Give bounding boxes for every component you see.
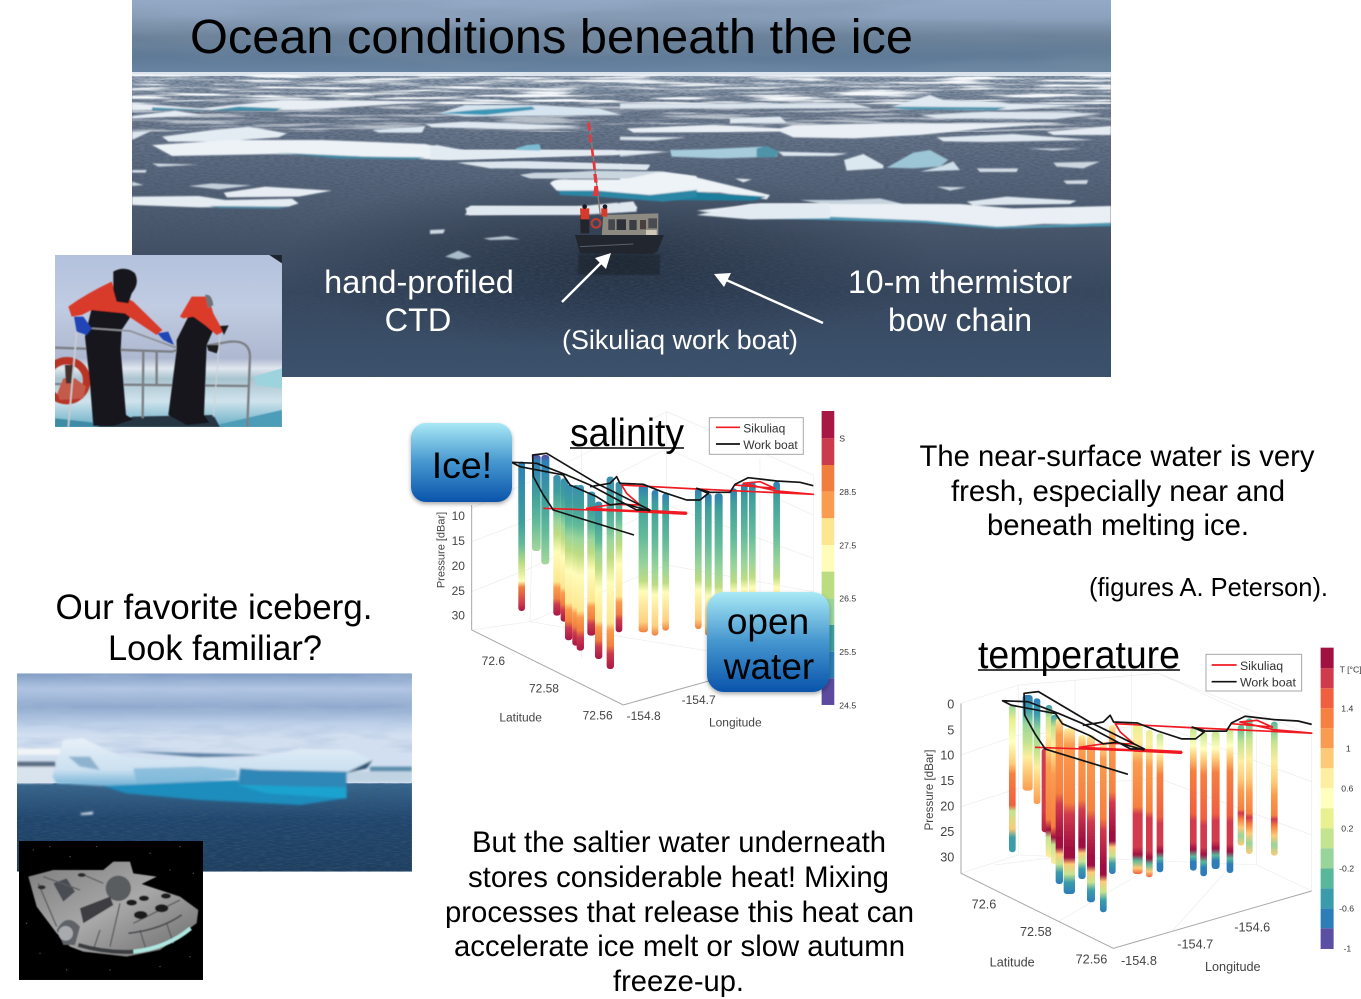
temperature axis labels: 25: [940, 825, 954, 839]
salinity axis labels: 72.58: [529, 681, 559, 695]
temperature axis labels: [923, 697, 1270, 974]
photo: iceberg: [17, 673, 412, 872]
text block: near-surface line 3: beneath melting ice.: [987, 509, 1249, 542]
right ice floes: [620, 95, 1111, 229]
temperature legend: Work boat: [1240, 676, 1297, 690]
salinity legend: [709, 418, 803, 454]
salinity axis labels: Pressure [dBar]: [436, 512, 448, 588]
boat and mast: [575, 118, 664, 275]
salinity colorbar: 27.5: [839, 540, 856, 550]
temperature data columns: [1009, 695, 1278, 912]
salinity legend: Sikuliaq: [743, 422, 785, 436]
temperature axis labels: 15: [940, 774, 954, 788]
label: 10-m thermistor bow chain: bow chain: [888, 302, 1032, 338]
temperature axis labels: 5: [947, 723, 954, 737]
temperature axis labels: 0: [947, 697, 954, 711]
heading: iceberg caption line 1: Our favorite iceberg.: [56, 588, 372, 627]
salinity colorbar: 26.5: [839, 594, 856, 604]
central floes around boat: [430, 145, 830, 259]
temperature colorbar: 0.2: [1341, 824, 1353, 834]
text block: near-surface water note: The near-surface water is very: [920, 440, 1315, 473]
temperature axis labels: Longitude: [1205, 960, 1261, 974]
callout: open water: open: [727, 601, 809, 642]
panel: hero ice photo with boat: [132, 0, 1111, 377]
salinity colorbar: 28.5: [839, 487, 856, 497]
callout: open water: [707, 592, 830, 692]
photo: Millennium Falcon on starfield: [19, 841, 203, 980]
salinity axis labels: Longitude: [709, 716, 762, 730]
chart: salinity profiles: [436, 411, 856, 730]
heading: temperature: temperature: [978, 634, 1180, 677]
text block: saltier water note: processes that release this heat can: [445, 896, 914, 929]
salinity axis labels: [436, 509, 762, 730]
left ice floes: [132, 100, 622, 215]
salinity legend: Work boat: [743, 438, 798, 452]
text block: saltier water note: freeze-up.: [613, 965, 744, 998]
text block: saltier water note: accelerate ice melt or slow autumn: [454, 930, 905, 963]
temperature axis labels: -154.8: [1121, 954, 1157, 968]
label: 10-m thermistor bow chain: 10-m thermistor: [848, 264, 1072, 300]
temperature colorbar: -0.2: [1339, 864, 1354, 874]
title: Ocean conditions beneath the ice: [190, 11, 913, 64]
callout: Ice!: Ice!: [432, 444, 492, 486]
temperature axis labels: 20: [940, 799, 954, 813]
salinity colorbar: [822, 411, 856, 710]
temperature colorbar: 1: [1346, 744, 1351, 754]
salinity axis labels: -154.8: [627, 709, 661, 723]
salinity axis labels: 15: [452, 534, 465, 548]
temperature axis labels: Pressure [dBar]: [923, 749, 936, 830]
callout: Ice!: [411, 423, 512, 502]
temperature ship tracks: [1003, 692, 1312, 774]
heading: iceberg caption line 2: Look familiar?: [108, 629, 322, 668]
label: hand-profiled CTD: CTD: [385, 302, 451, 338]
temperature axis labels: 30: [940, 851, 954, 865]
temperature colorbar: 0.6: [1341, 784, 1353, 794]
heading: salinity: salinity: [570, 412, 685, 455]
salinity colorbar: 24.5: [839, 700, 856, 710]
text block: saltier water note: But the saltier water underneath: [472, 826, 886, 859]
salinity axis labels: 30: [452, 608, 465, 622]
salinity data columns: [518, 455, 780, 669]
temperature colorbar: 1.4: [1341, 704, 1353, 714]
arrow: to bow chain: [714, 273, 823, 323]
callout: open water: water: [723, 646, 814, 687]
label: Sikuliaq work boat: (Sikuliaq work boat): [562, 325, 798, 355]
arrow: to CTD position: [562, 253, 611, 302]
salinity axis labels: 72.56: [583, 708, 613, 722]
label: hand-profiled CTD: hand-profiled: [324, 264, 514, 300]
salinity axis labels: 72.6: [482, 654, 505, 668]
temperature axis labels: 10: [940, 748, 954, 762]
temperature axis labels: 72.6: [972, 897, 996, 911]
temperature legend: Sikuliaq: [1240, 659, 1283, 673]
text block: saltier water note: [445, 826, 914, 998]
temperature axis labels: -154.6: [1234, 921, 1270, 935]
text block: near-surface line 2: fresh, especially near and: [951, 475, 1285, 508]
salinity axis labels: 20: [452, 559, 465, 573]
salinity axis labels: Latitude: [499, 711, 542, 725]
temperature axis labels: 72.58: [1020, 925, 1052, 939]
temperature colorbar: [1321, 648, 1361, 954]
temperature colorbar: -0.6: [1339, 904, 1354, 914]
text block: figure credit: (figures A. Peterson).: [1089, 572, 1328, 602]
salinity axis labels: 10: [452, 509, 465, 523]
temperature axis labels: 72.56: [1076, 952, 1107, 966]
salinity ship tracks: [512, 453, 813, 535]
salinity colorbar: S: [839, 434, 845, 444]
salinity axis labels: -154.7: [682, 693, 716, 707]
salinity axis labels: 25: [452, 584, 465, 598]
temperature legend: [1206, 654, 1302, 691]
temperature colorbar: -1: [1343, 944, 1351, 954]
chart: temperature profiles: [923, 648, 1361, 974]
photo: two people profiling from boat deck: [47, 255, 282, 427]
temperature axis labels: -154.7: [1177, 937, 1213, 951]
temperature axis labels: Latitude: [990, 956, 1035, 970]
text block: saltier water note: stores considerable heat! Mixing: [468, 861, 889, 894]
salinity colorbar: 25.5: [839, 647, 856, 657]
